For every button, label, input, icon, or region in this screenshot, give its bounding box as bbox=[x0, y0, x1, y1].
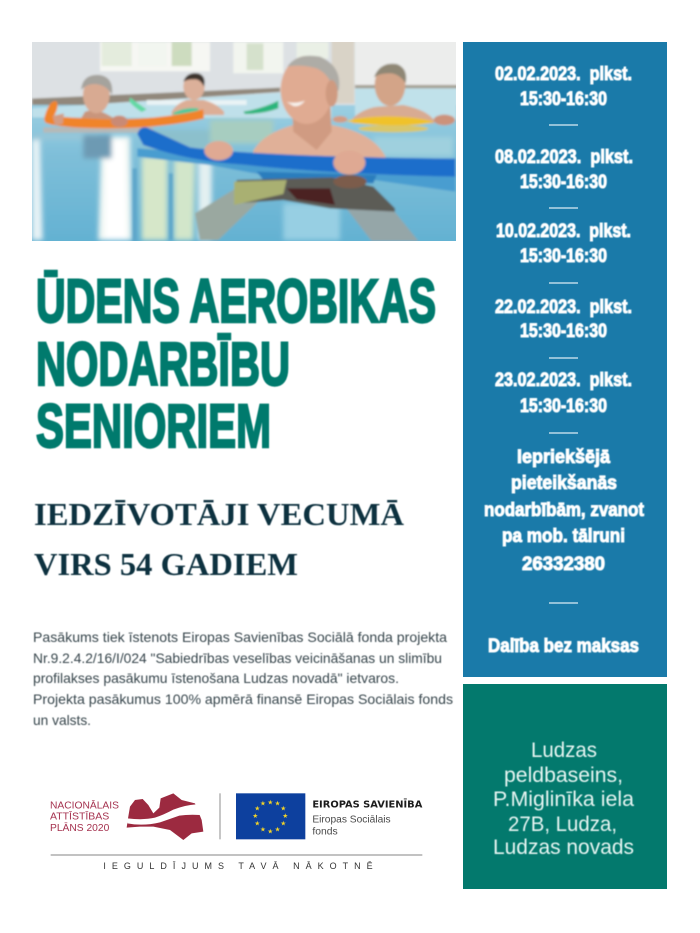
panel: location: Ludzas bbox=[531, 739, 597, 762]
registration note: nodarbībām, zvanot bbox=[484, 500, 645, 521]
noodle shadow and underwater reflection bbox=[137, 148, 455, 192]
project description text bbox=[33, 629, 453, 728]
panel: schedule and registration bbox=[463, 42, 667, 677]
blue noodle bbox=[137, 127, 455, 177]
panel: location: P.Miglinīka iela bbox=[493, 788, 634, 811]
title: SENIORIEM bbox=[36, 392, 271, 460]
logo: EU flag, Eiropas Savienība: ★ bbox=[280, 820, 286, 828]
pool reflections bbox=[210, 120, 273, 143]
registration note bbox=[484, 447, 645, 575]
logo: Nacionālais attīstības plāns 2020: NACIONĀLAIS bbox=[50, 800, 119, 811]
panel: location bbox=[463, 684, 667, 889]
logo: EU flag, Eiropas Savienība: ★ bbox=[282, 812, 288, 820]
logo: EU flag, Eiropas Savienība: ★ bbox=[252, 812, 258, 820]
slogan with rule: IEGULDĪJUMS TAVĀ NĀKOTNĒ bbox=[103, 861, 373, 871]
main swimmer bbox=[252, 124, 387, 160]
logo: EU flag, Eiropas Savienība: ★ bbox=[267, 828, 273, 836]
registration note: 26332380 bbox=[522, 554, 605, 575]
logo: EU flag, Eiropas Savienība: ★ bbox=[254, 820, 260, 828]
logo: Nacionālais attīstības plāns 2020 bbox=[50, 793, 203, 840]
project description text: un valsts. bbox=[33, 712, 91, 728]
logo: EU flag, Eiropas Savienība: fonds bbox=[312, 826, 338, 837]
logo: EU flag, Eiropas Savienība: ★ bbox=[280, 805, 286, 813]
logo: EU flag, Eiropas Savienība: ★ bbox=[267, 798, 273, 806]
schedule dates: 22.02.2023. plkst. bbox=[495, 297, 632, 318]
logo: EU flag, Eiropas Savienība: ★ bbox=[260, 825, 266, 833]
project description text: Pasākums tiek īstenots Eiropas Savienības Sociālā fonda projekta bbox=[33, 629, 447, 645]
logos block bbox=[50, 793, 423, 871]
logo: EU flag, Eiropas Savienība bbox=[236, 793, 423, 839]
panel: location: Ludzas novads bbox=[493, 836, 634, 859]
logo: Nacionālais attīstības plāns 2020: PLĀNS 2020 bbox=[50, 823, 109, 834]
swimmers in background bbox=[80, 111, 117, 120]
project description text: profilakses pasākumu īstenošana Ludzas novadā" ietvaros. bbox=[33, 670, 399, 686]
logo: Nacionālais attīstības plāns 2020: ATTĪSTĪBAS bbox=[50, 812, 109, 823]
title: ŪDENS AEROBIKAS bbox=[36, 267, 436, 335]
schedule dates: 15:30-16:30 bbox=[520, 396, 607, 417]
title bbox=[36, 267, 436, 460]
project description text: Projekta pasākumus 100% apmērā finansē Eiropas Sociālais fonds bbox=[33, 691, 453, 707]
schedule dates: 08.02.2023. plkst. bbox=[495, 147, 633, 168]
logo: EU flag, Eiropas Savienība: ★ bbox=[260, 800, 266, 808]
logo: EU flag, Eiropas Savienība: Eiropas Sociālais bbox=[312, 815, 391, 826]
schedule dates: 23.02.2023. plkst. bbox=[495, 370, 632, 391]
schedule dates: 15:30-16:30 bbox=[520, 89, 607, 110]
subtitle: target audience: IEDZĪVOTĀJI VECUMĀ bbox=[34, 496, 404, 532]
registration note: Iepriekšējā bbox=[517, 447, 610, 468]
schedule dates: 15:30-16:30 bbox=[520, 321, 607, 342]
logo: EU flag, Eiropas Savienība: ★ bbox=[254, 805, 260, 813]
registration note: pieteikšanās bbox=[511, 473, 617, 494]
panel: location: peldbaseins, bbox=[504, 764, 623, 787]
photo: seniors doing water aerobics in a pool bbox=[30, 40, 462, 245]
project description text: Nr.9.2.4.2/16/I/024 "Sabiedrības veselības veicināšanas un slimību bbox=[33, 650, 442, 666]
schedule dates: 15:30-16:30 bbox=[520, 246, 607, 267]
free participation note: Dalība bez maksas bbox=[488, 636, 639, 657]
orange noodle bbox=[44, 101, 204, 129]
logo: EU flag, Eiropas Savienība: EIROPAS SAVIENĪBA bbox=[312, 797, 423, 810]
registration note: pa mob. tālruni bbox=[502, 526, 625, 547]
schedule dates: 02.02.2023. plkst. bbox=[495, 64, 632, 85]
subtitle: target audience bbox=[34, 496, 404, 582]
logo: EU flag, Eiropas Savienība: ★ bbox=[275, 800, 281, 808]
schedule dates: 15:30-16:30 bbox=[520, 172, 607, 193]
schedule dates bbox=[495, 64, 633, 417]
schedule dates: 10.02.2023. plkst. bbox=[496, 221, 631, 242]
title: NODARBĪBU bbox=[36, 330, 290, 398]
panel: location: 27B, Ludza, bbox=[508, 813, 617, 836]
subtitle: target audience: VIRS 54 GADIEM bbox=[34, 546, 298, 582]
divider bbox=[219, 793, 221, 839]
logo: EU flag, Eiropas Savienība: ★ bbox=[275, 825, 281, 833]
